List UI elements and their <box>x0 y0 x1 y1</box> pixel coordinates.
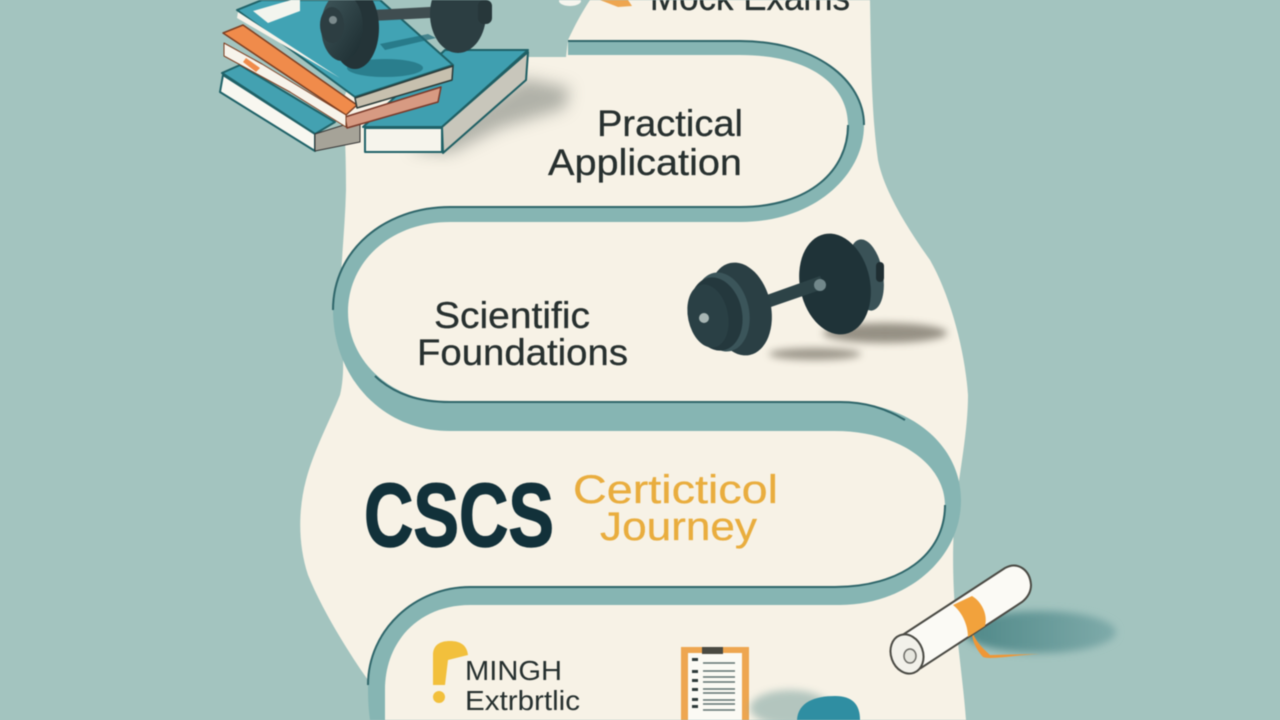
text: practical application: Practical <box>597 103 743 144</box>
title: certification journey: Journey <box>600 505 757 549</box>
text: mock exam label <box>465 655 580 716</box>
lower left teal book <box>220 65 360 151</box>
title: certification journey <box>573 468 778 549</box>
icon: diploma scroll <box>885 566 1116 678</box>
text: scientific foundations <box>417 295 628 373</box>
text: practical application <box>548 103 743 183</box>
title: CSCS: CSCS <box>364 466 554 566</box>
red edged book pages <box>345 87 441 128</box>
cream winding path background <box>300 0 968 720</box>
icon: stack of books with dumbbell <box>220 0 528 153</box>
icon: clipboard <box>681 647 749 720</box>
teal serpentine band <box>333 41 961 720</box>
large teal book <box>363 50 528 153</box>
text: mock exam label: MINGH <box>465 655 562 686</box>
title: certification journey: Certicticol <box>573 468 778 512</box>
top dumbbell <box>320 0 492 69</box>
icon: fragment of top item <box>559 0 632 7</box>
book shadow <box>410 78 570 153</box>
dumbbell shadow on book <box>347 59 423 77</box>
icon: dumbbell <box>682 227 947 361</box>
text: scientific foundations: Scientific <box>434 295 590 336</box>
icon: teal object with shadow <box>750 690 860 720</box>
orange book <box>223 25 357 127</box>
text: practical application: Application <box>548 142 742 183</box>
text: scientific foundations: Foundations <box>417 332 628 373</box>
top teal book <box>237 0 453 108</box>
text: mock exam label: Extrbrtlic <box>465 685 580 716</box>
icon: yellow exclamation hook <box>433 641 468 703</box>
